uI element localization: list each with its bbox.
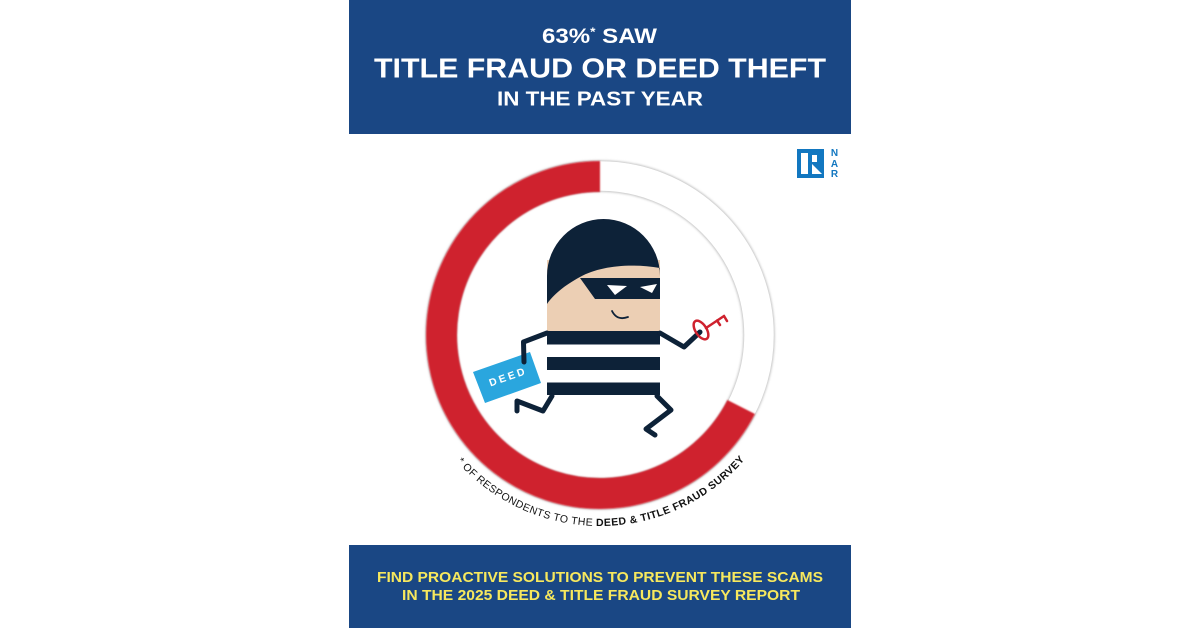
call to action line 2: IN THE 2025 DEED & TITLE FRAUD SURVEY REPORT — [402, 587, 800, 604]
header banner — [349, 0, 851, 134]
footnote: curved text — [460, 455, 743, 526]
icon: key — [691, 316, 727, 342]
heading: 63% saw: 63% — [542, 25, 584, 48]
heading: 63% saw: SAW — [596, 25, 657, 48]
footnote: curved text: DEED & TITLE FRAUD SURVEY — [596, 455, 743, 526]
limbs — [517, 332, 700, 435]
deed document — [473, 352, 541, 403]
call to action line 1: FIND PROACTIVE SOLUTIONS TO PREVENT THESE SCAMS — [377, 569, 823, 586]
footer banner — [349, 545, 851, 628]
icon: NAR logo — [797, 148, 839, 180]
deed document: DEED — [488, 366, 527, 389]
thief body — [547, 219, 660, 395]
footnote: curved text: * OF RESPONDENTS TO THE — [460, 458, 592, 526]
heading: title fraud or deed theft: TITLE FRAUD OR DEED THEFT — [374, 52, 826, 84]
donut chart: 63 percent — [441, 176, 759, 494]
illustration: thief — [473, 219, 727, 435]
icon: NAR logo: R — [831, 169, 839, 180]
icon: NAR logo: N — [831, 148, 838, 159]
icon: NAR logo: A — [831, 159, 838, 170]
heading: 63% saw: * — [590, 25, 596, 39]
heading: in the past year: IN THE PAST YEAR — [497, 88, 704, 110]
